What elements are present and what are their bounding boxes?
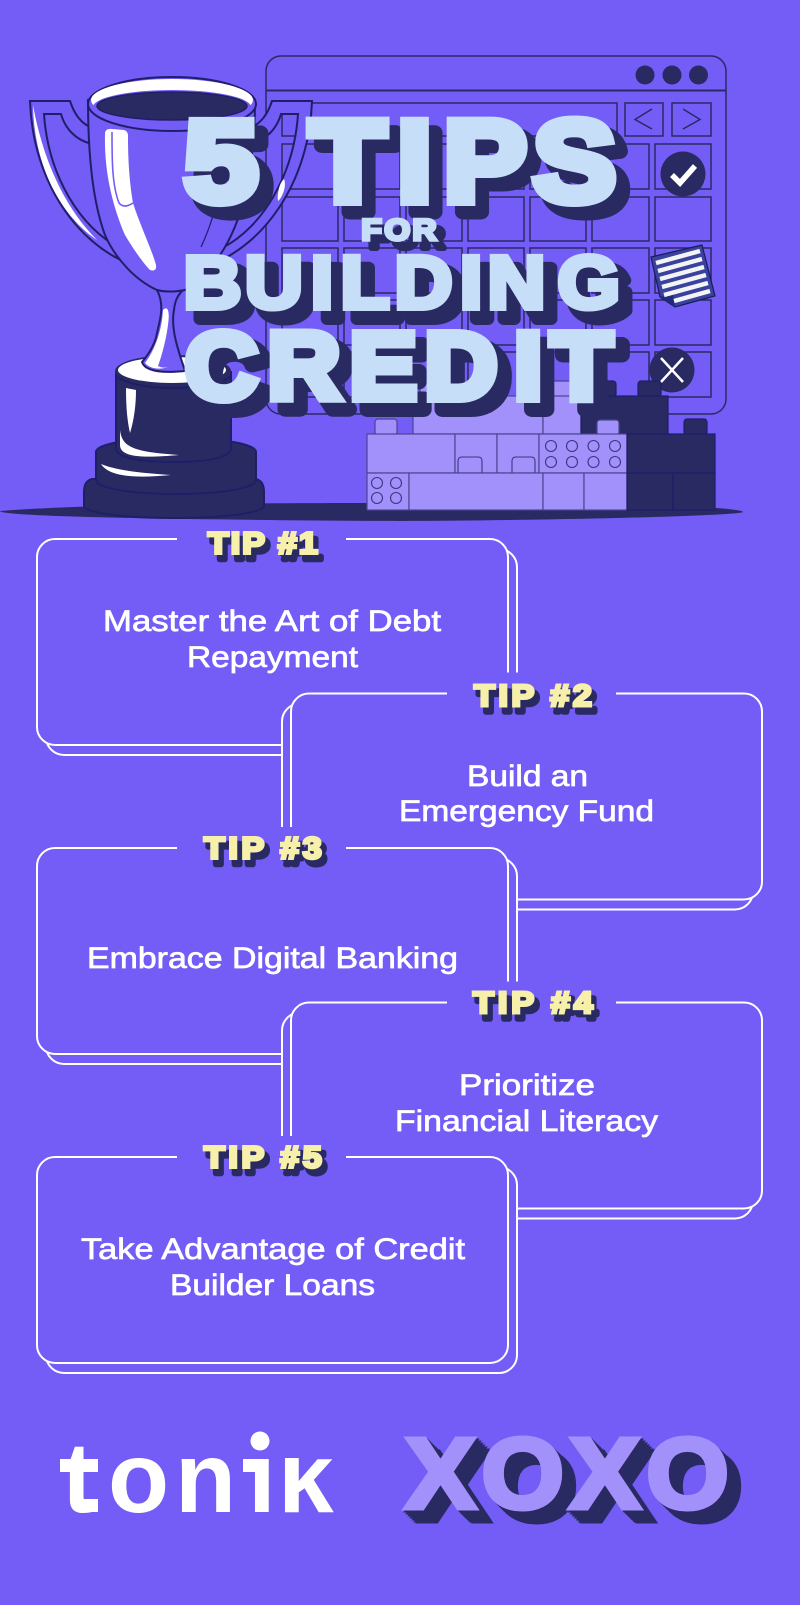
tip 3 heading: TIP #3 <box>208 837 326 871</box>
title shadow: CREDIT <box>196 324 623 430</box>
tip 5 heading: TIP #5 <box>208 1146 326 1180</box>
toy bricks <box>367 381 715 510</box>
icon: note paper <box>651 245 715 307</box>
trophy stem <box>142 290 185 372</box>
title face: CREDIT <box>185 313 612 419</box>
panel: tip 2 <box>282 672 762 910</box>
tip 1 text <box>103 605 442 674</box>
trophy <box>30 77 312 518</box>
tip 1 heading: TIP #1 <box>212 532 322 566</box>
tip 3 text: Embrace Digital Banking <box>87 942 458 975</box>
xoxo extrusion: XOXO <box>413 1426 737 1537</box>
browser calendar window <box>266 56 726 414</box>
tip 3 heading: TIP #3 <box>204 831 322 865</box>
panel: tip 3 <box>37 827 517 1064</box>
tip 4 heading: TIP #4 <box>473 985 593 1020</box>
tip 4 text: Prioritize <box>459 1069 595 1102</box>
tip 5 heading: TIP #5 <box>204 1140 322 1174</box>
title face <box>184 98 620 419</box>
xoxo extrusion: XOXO <box>419 1431 743 1542</box>
tip 5 text: Take Advantage of Credit <box>81 1233 466 1266</box>
panel: tip 1 <box>37 523 517 755</box>
trophy right handle <box>212 101 312 264</box>
xoxo extrusion: XOXO <box>415 1428 739 1539</box>
xoxo extrusion: XOXO <box>411 1424 735 1535</box>
tip 4 text: Financial Literacy <box>395 1105 658 1138</box>
hero illustration <box>0 56 743 521</box>
title face: 5 <box>184 98 258 226</box>
tip 2 heading: TIP #2 <box>478 684 596 719</box>
trophy left handle <box>30 101 130 264</box>
icon: check circle <box>660 152 706 196</box>
tip 1 text: Repayment <box>187 641 359 674</box>
xoxo extrusion: XOXO <box>407 1420 731 1531</box>
panel: tip 5 <box>37 1136 517 1373</box>
title shadow: 5 <box>195 109 269 237</box>
tip 4 text <box>395 1069 658 1138</box>
trophy cup <box>88 77 256 292</box>
tip 2 text: Emergency Fund <box>399 795 654 828</box>
title shadow: FOR <box>370 220 445 255</box>
tip 2 heading: TIP #2 <box>474 678 592 713</box>
title shadow: BUILDING <box>195 253 631 335</box>
title: 5 tips for building credit <box>184 98 631 430</box>
xoxo extrusion: XOXO <box>417 1430 741 1541</box>
logo: tonik: tonik <box>62 1422 334 1534</box>
title shadow <box>195 109 631 430</box>
trophy bases <box>84 355 264 518</box>
title shadow: TIPS <box>321 109 627 237</box>
panel: tip 4 <box>282 982 762 1218</box>
tip 5 text <box>81 1233 466 1302</box>
icon: cross circle <box>650 348 694 392</box>
title face: BUILDING <box>184 242 620 324</box>
logo: xoxo <box>405 1418 743 1542</box>
ground shadow <box>0 503 743 521</box>
tip 4 heading: TIP #4 <box>477 991 597 1026</box>
tip 5 text: Builder Loans <box>170 1269 375 1302</box>
xoxo extrusion: XOXO <box>409 1422 733 1533</box>
tip 1 heading: TIP #1 <box>208 526 318 560</box>
tip 1 text: Master the Art of Debt <box>103 605 442 638</box>
tip 2 text: Build an <box>467 760 588 793</box>
title face: FOR <box>362 212 437 247</box>
xoxo face: XOXO <box>405 1418 729 1529</box>
title face: TIPS <box>310 98 616 226</box>
tip 2 text <box>399 760 654 828</box>
